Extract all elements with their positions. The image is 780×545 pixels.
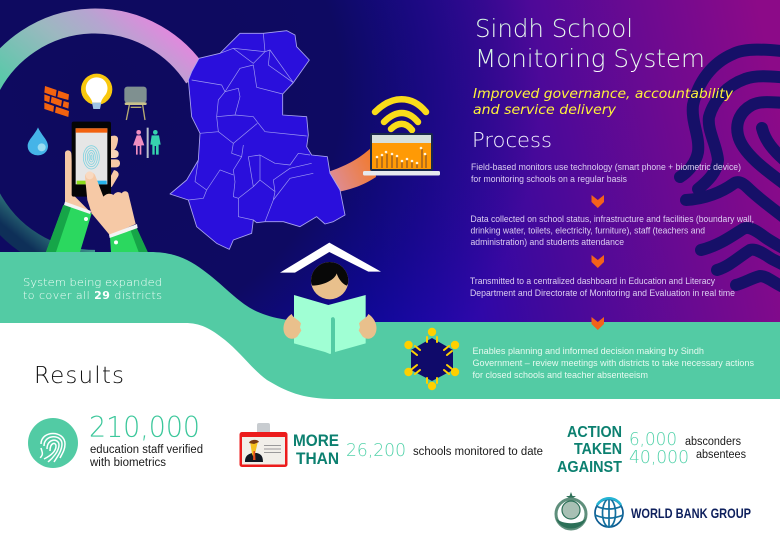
- left hand: [283, 314, 301, 339]
- process step 1 text: for monitoring schools on a regular basis: [471, 174, 627, 184]
- right hand: [359, 314, 377, 339]
- icons and phone illustration: [28, 74, 161, 252]
- process step 1 text: [471, 162, 741, 184]
- result: action taken: TAKEN: [574, 441, 622, 458]
- title: Sindh School: [475, 14, 633, 43]
- icon: bricks: [44, 86, 69, 117]
- logo: Sindh government emblem: [556, 492, 586, 529]
- process step 2 text: administration) and students attendance: [470, 237, 624, 247]
- subtitle: Improved governance, accountability: [473, 87, 733, 102]
- dark gradient background: [0, 0, 780, 330]
- finger nail: [86, 171, 94, 179]
- result: schools monitored: [240, 423, 543, 468]
- head: [311, 262, 348, 299]
- logo: World Bank globe: [595, 498, 623, 527]
- large fingerprint backdrop: [680, 50, 780, 290]
- gradient ring arc: [0, 21, 197, 262]
- result: action taken: absentees: [696, 449, 746, 461]
- process step 4 text: [472, 346, 754, 380]
- laptop bar chart: [376, 149, 427, 168]
- open book: [294, 295, 366, 354]
- title: Monitoring System: [475, 44, 705, 73]
- logo: World Bank Group wordmark: WORLD BANK GROUP: [631, 505, 751, 521]
- result: action taken: absconders: [685, 436, 741, 448]
- teal wave band: [0, 252, 780, 399]
- result: schools monitored: THAN: [296, 449, 339, 468]
- result: action taken: ACTION: [567, 424, 622, 441]
- meeting table icon: [404, 328, 459, 390]
- result: schools monitored: MORE: [293, 431, 339, 450]
- process step 4 text: Government – review meetings with districts to take necessary actions: [472, 358, 754, 368]
- process step 2 text: Data collected on school status, infrastructure and facilities (boundary wall,: [470, 214, 754, 224]
- result: action taken: 6,000: [629, 429, 677, 450]
- process step 4 text: Enables planning and informed decision making by Sindh: [472, 346, 704, 356]
- subtitle: and service delivery: [473, 103, 616, 118]
- result: schools monitored: 26,200: [346, 440, 406, 461]
- left sleeve: [46, 202, 92, 252]
- icon: light bulb: [81, 74, 112, 109]
- connector band from map to laptop: [328, 147, 376, 192]
- process step 3 text: Department and Directorate of Monitoring and Evaluation in real time: [470, 288, 735, 298]
- result: action taken: [557, 424, 746, 476]
- callout: expansion: [23, 276, 162, 302]
- result: action taken: 40,000: [629, 447, 689, 468]
- icon: ID card: [240, 423, 288, 467]
- result: staff verified: education staff verified: [90, 444, 203, 456]
- smartphone: [72, 122, 111, 197]
- phone fingerprint: [83, 146, 99, 169]
- roof: [280, 243, 381, 273]
- arrow 2: [592, 255, 604, 268]
- title: [475, 14, 705, 73]
- callout: expansion: to cover all 29 districts: [23, 289, 162, 302]
- result: action taken: AGAINST: [557, 459, 622, 476]
- process step 1 text: Field-based monitors use technology (smart phone + biometric device): [471, 162, 741, 172]
- laptop with wifi: [363, 99, 440, 176]
- subtitle: [473, 87, 733, 118]
- result: staff verified: with biometrics: [89, 457, 166, 469]
- result: schools monitored: schools monitored to date: [413, 446, 543, 458]
- result: staff verified: 210,000: [89, 411, 200, 444]
- icon: chair: [124, 87, 147, 120]
- left hand behind phone: [65, 150, 92, 213]
- process step 2 text: drinking water, toilets, electricity, furniture), staff (teachers and: [470, 226, 705, 236]
- arrow 1: [592, 195, 604, 208]
- icon: toilet figures: [133, 128, 161, 158]
- callout: expansion: System being expanded: [23, 276, 162, 289]
- map of Sindh: [170, 31, 345, 249]
- result: staff verified: [28, 411, 203, 469]
- person reading under roof: [280, 243, 381, 354]
- process step 4 text: for closed schools and teacher absenteeism: [472, 370, 648, 380]
- phone fingers: [107, 136, 120, 187]
- heading: results: Results: [34, 363, 124, 389]
- process step 3 text: [470, 276, 735, 298]
- process step 2 text: [470, 214, 754, 247]
- white lower section: [0, 323, 780, 545]
- hair: [311, 262, 348, 286]
- pointing hand: [85, 172, 136, 235]
- icon: water drop: [28, 127, 48, 155]
- process step 3 text: Transmitted to a centralized dashboard in Education and Literacy: [470, 276, 715, 286]
- icon: fingerprint circle: [28, 418, 78, 468]
- heading: process: Process: [472, 128, 552, 152]
- icon: wifi: [375, 99, 426, 130]
- arrow 3: [592, 317, 604, 330]
- right sleeve: [109, 224, 148, 252]
- book spine: [331, 317, 335, 354]
